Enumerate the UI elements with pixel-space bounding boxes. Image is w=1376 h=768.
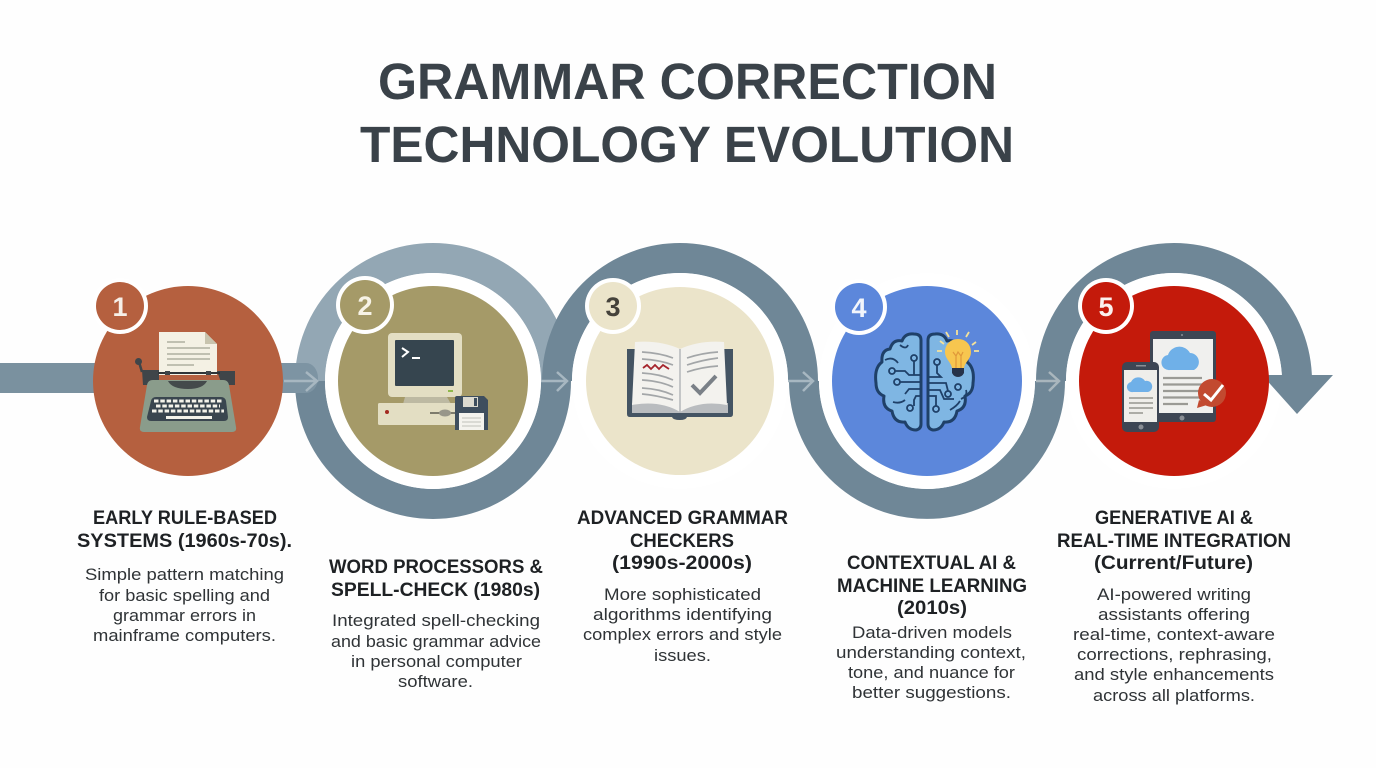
connector arrow 1 to 2 bbox=[284, 372, 317, 391]
heading: advanced grammar checkers bbox=[577, 508, 788, 574]
panel: step 3 circle bbox=[586, 287, 774, 475]
heading: generative AI: (Current/Future) bbox=[1094, 553, 1253, 574]
description: step 1: for basic spelling and bbox=[99, 586, 270, 605]
description: step 4: understanding context, bbox=[836, 643, 1026, 662]
heading: word processors: SPELL-CHECK (1980s) bbox=[331, 580, 540, 601]
description: step 3: algorithms identifying bbox=[593, 605, 772, 624]
description: step 2 bbox=[331, 611, 541, 691]
title bbox=[360, 53, 1014, 173]
serpentine timeline ribbon bbox=[0, 258, 1297, 504]
text block: step 5 bbox=[1057, 508, 1291, 705]
heading: generative AI bbox=[1057, 508, 1291, 574]
icon: brain with circuit traces and light bulb bbox=[876, 330, 979, 430]
text block: step 2 bbox=[329, 557, 543, 691]
heading: generative AI: GENERATIVE AI & bbox=[1095, 508, 1253, 529]
text block: step 1 bbox=[77, 508, 292, 645]
heading: contextual AI: (2010s) bbox=[897, 598, 967, 619]
description: step 3: More sophisticated bbox=[604, 585, 761, 604]
badge 1: 1 bbox=[112, 292, 128, 322]
badge 3 bbox=[585, 278, 641, 334]
description: step 1 bbox=[85, 565, 284, 645]
description: step 4: tone, and nuance for bbox=[848, 663, 1015, 682]
badge 3: 3 bbox=[605, 292, 621, 322]
icon: open book with correction marks bbox=[627, 342, 733, 420]
badge 4 bbox=[831, 279, 887, 335]
badge 2: 2 bbox=[357, 291, 373, 321]
heading: word processors bbox=[329, 557, 543, 601]
description: step 5: assistants offering bbox=[1098, 605, 1250, 624]
heading: early rule-based systems: EARLY RULE-BASED bbox=[93, 508, 277, 529]
heading: contextual AI bbox=[837, 553, 1027, 619]
description: step 3: complex errors and style bbox=[583, 625, 782, 644]
description: step 1: grammar errors in bbox=[113, 606, 256, 625]
connector arrow 2 to 3 bbox=[541, 372, 567, 391]
badge 1 bbox=[92, 278, 148, 334]
description: step 2: and basic grammar advice bbox=[331, 632, 541, 651]
description: step 2: in personal computer bbox=[351, 652, 522, 671]
icon: tablet and phone with clouds and check badge bbox=[1122, 331, 1226, 432]
panel: step 5 circle bbox=[1079, 286, 1269, 476]
description: step 4 bbox=[836, 623, 1026, 702]
description: step 1: Simple pattern matching bbox=[85, 565, 284, 584]
heading: word processors: WORD PROCESSORS & bbox=[329, 557, 543, 578]
description: step 4: Data-driven models bbox=[852, 623, 1012, 642]
title: TECHNOLOGY EVOLUTION bbox=[360, 116, 1014, 173]
badge 5 bbox=[1078, 278, 1134, 334]
description: step 5: across all platforms. bbox=[1093, 686, 1255, 705]
panel: step 2 circle bbox=[338, 286, 528, 476]
description: step 5: AI-powered writing bbox=[1097, 585, 1251, 604]
icon: typewriter bbox=[135, 332, 236, 432]
badge 5: 5 bbox=[1098, 292, 1114, 322]
description: step 3: issues. bbox=[654, 646, 711, 665]
description: step 5: corrections, rephrasing, bbox=[1077, 645, 1272, 664]
description: step 5: real-time, context-aware bbox=[1073, 625, 1275, 644]
heading: early rule-based systems bbox=[77, 508, 292, 552]
badge 4: 4 bbox=[851, 293, 867, 323]
title: GRAMMAR CORRECTION bbox=[378, 53, 997, 110]
description: step 3 bbox=[583, 585, 782, 665]
panel: step 4 circle bbox=[832, 286, 1022, 476]
description: step 4: better suggestions. bbox=[852, 683, 1011, 702]
connector arrow 3 to 4 bbox=[788, 372, 813, 391]
heading: generative AI: REAL-TIME INTEGRATION bbox=[1057, 531, 1291, 552]
panel: step 1 circle bbox=[93, 286, 283, 476]
description: step 2: software. bbox=[398, 672, 473, 691]
icon: retro computer with floppy disk bbox=[378, 333, 488, 430]
description: step 5: and style enhancements bbox=[1074, 665, 1274, 684]
text block: step 4 bbox=[836, 553, 1027, 702]
heading: advanced grammar checkers: (1990s-2000s) bbox=[612, 553, 752, 574]
badge 2 bbox=[336, 276, 394, 334]
heading: advanced grammar checkers: ADVANCED GRAMMAR bbox=[577, 508, 788, 529]
text block: step 3 bbox=[577, 508, 788, 665]
description: step 5 bbox=[1073, 585, 1275, 705]
heading: contextual AI: MACHINE LEARNING bbox=[837, 576, 1027, 597]
arrowhead at ribbon end bbox=[1262, 375, 1333, 414]
heading: advanced grammar checkers: CHECKERS bbox=[630, 531, 734, 552]
description: step 2: Integrated spell-checking bbox=[332, 611, 540, 630]
connector arrow 4 to 5 bbox=[1036, 372, 1059, 391]
description: step 1: mainframe computers. bbox=[93, 626, 276, 645]
heading: contextual AI: CONTEXTUAL AI & bbox=[847, 553, 1016, 574]
heading: early rule-based systems: SYSTEMS (1960s-70s). bbox=[77, 531, 292, 552]
